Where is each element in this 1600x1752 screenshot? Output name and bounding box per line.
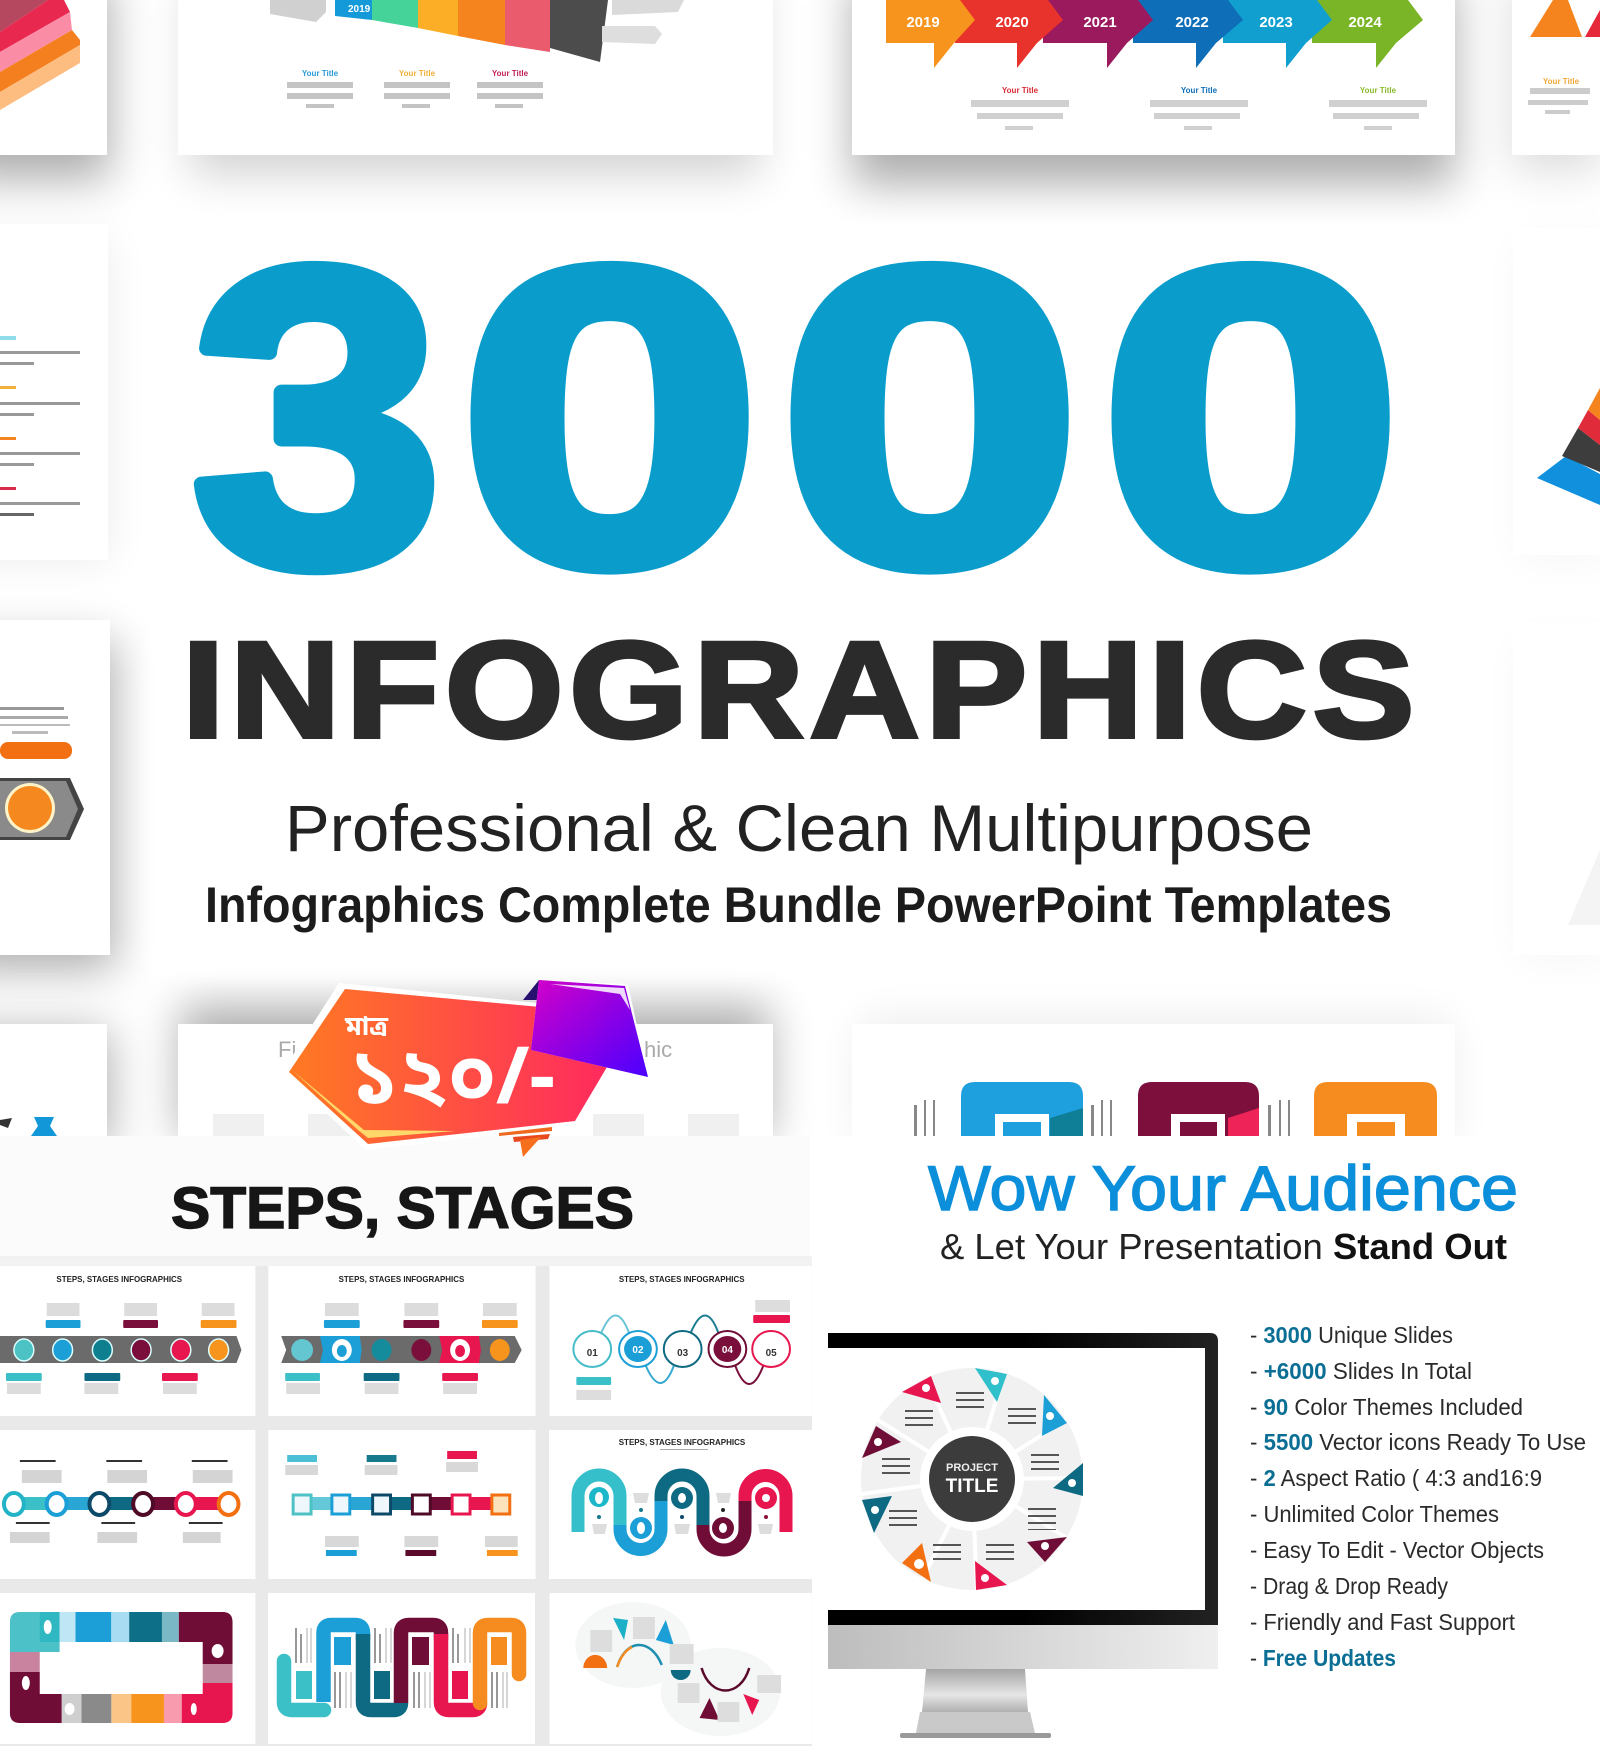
arrow banner timeline: 2022 [1175, 14, 1209, 31]
ribbon graphic [270, 0, 684, 62]
arrow banner timeline: 2020 [995, 14, 1029, 31]
arrow banner timeline: 2019 [906, 14, 940, 31]
title number 3000 [191, 181, 1402, 653]
panel: central white area [150, 225, 1485, 975]
arrow banner timeline [886, 0, 1423, 68]
slide caption text [287, 69, 543, 108]
wheel text lines [896, 1392, 1045, 1564]
feature list: - 3000 Unique Slides [1250, 1322, 1453, 1348]
price text: ১২০/- [350, 1031, 555, 1135]
faint slide title [278, 1037, 672, 1062]
title number 3000: 0 [779, 182, 1081, 653]
icon: orange pyramid [1528, 0, 1600, 114]
banner caption text: Your Title [1360, 86, 1397, 95]
slide: square wave [268, 1593, 535, 1744]
banner caption text: Your Title [1002, 86, 1039, 95]
wheel diagram [861, 1368, 1083, 1592]
center title: PROJECT [946, 1462, 998, 1474]
slide: squares timeline [268, 1430, 536, 1579]
feature list: - 5500 Vector icons Ready To Use [1250, 1429, 1586, 1455]
title number 3000: 0 [1100, 182, 1402, 653]
price text: মাত্র [344, 1011, 388, 1047]
left slide card with hexagon band [0, 620, 110, 955]
slide caption text: Your Title [399, 69, 436, 78]
slide: linked rings: 05 [766, 1348, 777, 1359]
feature list: - Free Updates [1250, 1645, 1396, 1671]
slide: rectangular loop [0, 1593, 255, 1744]
panel: wow your audience [812, 1136, 1600, 1752]
slide: linked rings [550, 1266, 812, 1416]
left slide card with list [0, 224, 108, 560]
feature list: - +6000 Slides In Total [1250, 1358, 1472, 1384]
rounded colored blocks [914, 1082, 1437, 1136]
right slide card faint [1513, 622, 1600, 955]
slide: circle band [0, 1266, 255, 1416]
slide: serpentine [549, 1430, 812, 1579]
slide: serpentine: STEPS, STAGES INFOGRAPHICS [619, 1438, 746, 1447]
slide: linked rings: 03 [677, 1348, 689, 1359]
center title [929, 1436, 1015, 1522]
faint slide title: hic [644, 1037, 672, 1062]
slide: dots timeline [0, 1430, 255, 1579]
faint slide title: Fi [278, 1037, 296, 1062]
banner caption text: Your Title [1181, 86, 1218, 95]
subtitle line one: Professional & Clean Multipurpose [285, 791, 1313, 865]
right slide card with pyramid [1513, 228, 1600, 555]
card shadows [0, 0, 1600, 1150]
subheading: & Let Your Presentation Stand Out [940, 1226, 1507, 1267]
heading: STEPS, STAGES [171, 1176, 634, 1241]
arrow banner timeline: 2023 [1259, 14, 1293, 31]
icon: figures [0, 1117, 57, 1136]
slide: circle band: STEPS, STAGES INFOGRAPHICS [56, 1275, 182, 1284]
monitor [828, 1333, 1218, 1738]
title word: INFOGRAPHICS [182, 614, 1420, 767]
subtitle line two: Infographics Complete Bundle PowerPoint Templates [205, 877, 1392, 933]
panel: steps stages [0, 1136, 812, 1752]
feature list: - Unlimited Color Themes [1250, 1501, 1499, 1527]
slide: linked rings: 01 [587, 1348, 598, 1359]
slide: segmented band: STEPS, STAGES INFOGRAPHICS [339, 1275, 464, 1284]
bottom row slide cards [0, 1024, 1600, 1136]
placeholder blocks [213, 1114, 739, 1136]
title number 3000: 0 [459, 182, 761, 653]
slide caption text: Your Title [302, 69, 339, 78]
top row slide cards [0, 0, 1600, 155]
icon: orange pyramid: Your Title [1543, 77, 1580, 86]
slide: linked rings: 04 [722, 1345, 733, 1356]
feature list: - Drag & Drop Ready [1250, 1573, 1448, 1599]
feature list: - Friendly and Fast Support [1250, 1609, 1516, 1635]
feature list [1250, 1322, 1586, 1671]
feature list: - Easy To Edit - Vector Objects [1250, 1537, 1544, 1563]
center title: TITLE [946, 1476, 998, 1497]
slide: segmented band [268, 1266, 536, 1416]
slide: linked rings: 02 [632, 1345, 644, 1356]
title number 3000: 3 [191, 181, 443, 653]
triangle markers [862, 1368, 1083, 1590]
feature list: - 90 Color Themes Included [1250, 1394, 1523, 1420]
icon: layered stripes [0, 0, 80, 110]
arrow banner timeline: 2021 [1083, 14, 1117, 31]
slide: wave with markers [550, 1593, 812, 1744]
arrow banner timeline: 2024 [1348, 14, 1382, 31]
banner caption text [971, 86, 1427, 130]
price badge [282, 980, 648, 1157]
slide: linked rings: STEPS, STAGES INFOGRAPHICS [619, 1275, 745, 1284]
ribbon graphic: 2019 [348, 4, 371, 15]
slide caption text: Your Title [492, 69, 529, 78]
heading: Wow Your Audience [928, 1154, 1518, 1224]
feature list: - 2 Aspect Ratio ( 4:3 and16:9 [1250, 1465, 1542, 1491]
